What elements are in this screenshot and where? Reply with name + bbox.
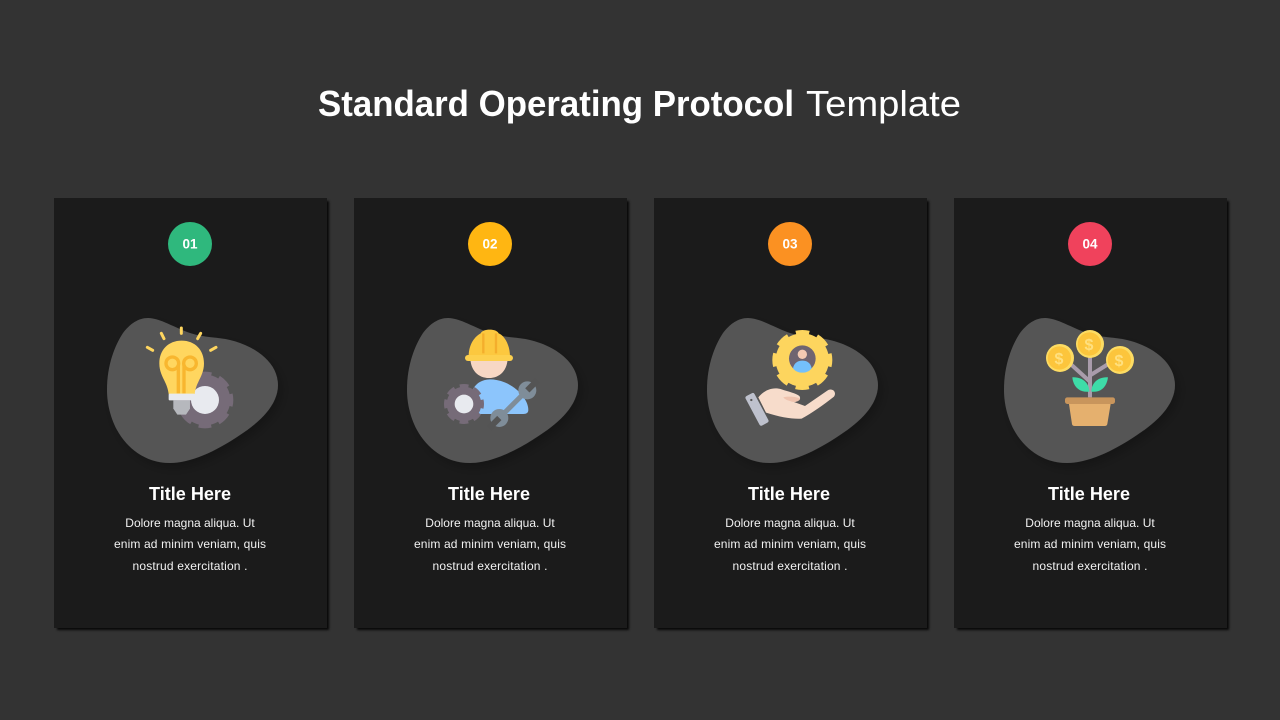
- title: Template: [806, 83, 961, 124]
- panel: card 01: [54, 198, 329, 630]
- number badge 04: [1068, 222, 1112, 266]
- panel: card 03: [654, 198, 929, 630]
- panel: card 04: [954, 198, 1229, 630]
- card body 04: Dolore magna aliqua. Ut: [1025, 516, 1155, 530]
- number badge 03: [768, 222, 812, 266]
- icon: money plant: [1004, 318, 1175, 463]
- card body 03: nostrud exercitation .: [732, 559, 848, 573]
- icon: money plant: $: [1055, 351, 1064, 368]
- card body 04: nostrud exercitation .: [1032, 559, 1148, 573]
- icon: engineer with gear and wrench: [407, 318, 578, 463]
- icon: money plant: $: [1115, 353, 1124, 370]
- number badge 01: [168, 222, 212, 266]
- card body 02: [414, 516, 566, 573]
- card body 03: enim ad minim veniam, quis: [714, 537, 866, 551]
- icon: light bulb and gear: [107, 318, 278, 463]
- card body 03: Dolore magna aliqua. Ut: [725, 516, 855, 530]
- card body 01: nostrud exercitation .: [132, 559, 248, 573]
- card body 02: nostrud exercitation .: [432, 559, 548, 573]
- card title 01: Title Here: [149, 483, 231, 504]
- number badge 02: 02: [482, 236, 498, 252]
- card body 01: Dolore magna aliqua. Ut: [125, 516, 255, 530]
- card body 04: enim ad minim veniam, quis: [1014, 537, 1166, 551]
- card body 02: enim ad minim veniam, quis: [414, 537, 566, 551]
- title: Standard Operating Protocol: [318, 83, 794, 124]
- number badge 03: 03: [782, 236, 798, 252]
- card title 03: Title Here: [748, 483, 830, 504]
- card body 01: enim ad minim veniam, quis: [114, 537, 266, 551]
- card title 04: Title Here: [1048, 483, 1130, 504]
- card body 02: Dolore magna aliqua. Ut: [425, 516, 555, 530]
- card body 01: [114, 516, 266, 573]
- icon: hand holding gear with person: [707, 318, 878, 463]
- icon: money plant: $: [1085, 337, 1094, 354]
- card body 04: [1014, 516, 1166, 573]
- card body 03: [714, 516, 866, 573]
- number badge 01: 01: [182, 236, 198, 252]
- panel: card 02: [354, 198, 629, 630]
- card title 02: Title Here: [448, 483, 530, 504]
- number badge 04: 04: [1082, 236, 1098, 252]
- number badge 02: [468, 222, 512, 266]
